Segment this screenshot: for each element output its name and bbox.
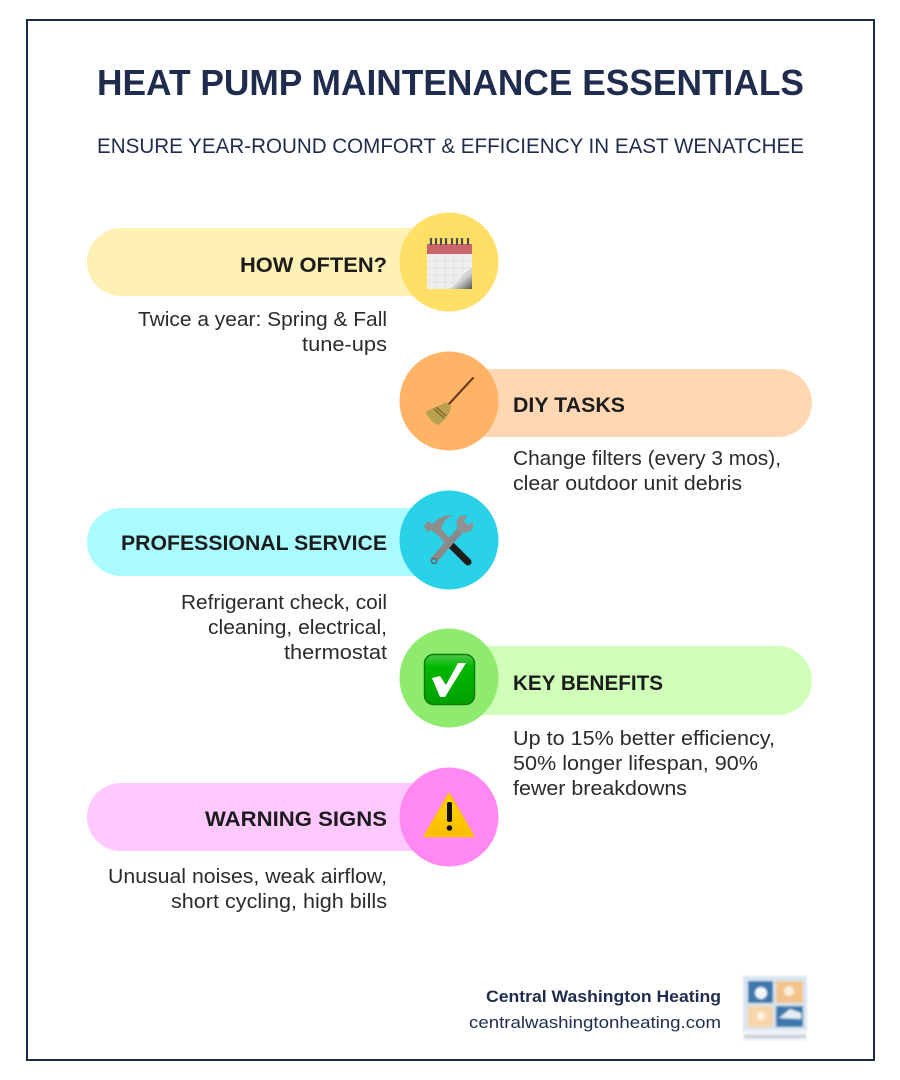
pill: professional service [87, 508, 449, 576]
text: professional service: thermostat [284, 642, 387, 664]
pill: how often [87, 228, 449, 296]
pill: warning signs [87, 783, 449, 851]
panel: warning signs [87, 768, 498, 913]
text: diy tasks: Change filters (every 3 mos), [513, 448, 781, 470]
text: key benefits: 50% longer lifespan, 90% [513, 753, 758, 775]
icon circle: warning signs [400, 768, 498, 866]
panel: diy tasks [400, 352, 812, 495]
text: how often: Twice a year: Spring & Fall [138, 309, 387, 331]
text: professional service: Refrigerant check, coil [181, 592, 387, 614]
text: key benefits: fewer breakdowns [513, 778, 687, 800]
icon circle: diy tasks [400, 352, 498, 450]
icon: hammer and wrench [424, 515, 473, 564]
panel: key benefits [400, 628, 812, 800]
heading: warning signs: WARNING SIGNS [205, 808, 387, 831]
text: key benefits: Up to 15% better efficiency, [513, 728, 775, 750]
footer brand name: Central Washington Heating [486, 988, 721, 1006]
heading: diy tasks: DIY TASKS [513, 394, 625, 417]
heading: key benefits: KEY BENEFITS [513, 672, 663, 695]
text: warning signs [108, 866, 387, 913]
pill: key benefits [449, 646, 812, 715]
icon circle: key benefits [400, 628, 498, 728]
text: professional service: cleaning, electrical, [208, 617, 387, 639]
text: key benefits [513, 728, 775, 800]
pill: diy tasks [449, 369, 812, 437]
panel: professional service [87, 490, 498, 664]
text: how often: tune-ups [302, 334, 387, 356]
text: warning signs: Unusual noises, weak airflow, [108, 866, 387, 888]
icon circle: how often [400, 212, 498, 312]
icon: calendar [427, 238, 472, 289]
icon: broom [426, 378, 473, 425]
icon: check mark [424, 654, 474, 704]
text: professional service [181, 592, 387, 664]
icon circle: professional service [400, 490, 498, 590]
logo [743, 976, 807, 1041]
text: diy tasks [513, 448, 781, 495]
title: HEAT PUMP MAINTENANCE ESSENTIALS [97, 62, 804, 103]
footer url: centralwashingtonheating.com [469, 1013, 721, 1032]
text: how often [138, 309, 387, 356]
heading: professional service: PROFESSIONAL SERVICE [121, 532, 387, 555]
icon: warning triangle [425, 794, 473, 836]
text: warning signs: short cycling, high bills [171, 891, 387, 913]
text: diy tasks: clear outdoor unit debris [513, 473, 742, 495]
subtitle: ENSURE YEAR-ROUND COMFORT & EFFICIENCY IN EAST WENATCHEE [97, 135, 804, 158]
panel: how often [87, 212, 498, 356]
heading: how often: HOW OFTEN? [240, 254, 387, 277]
